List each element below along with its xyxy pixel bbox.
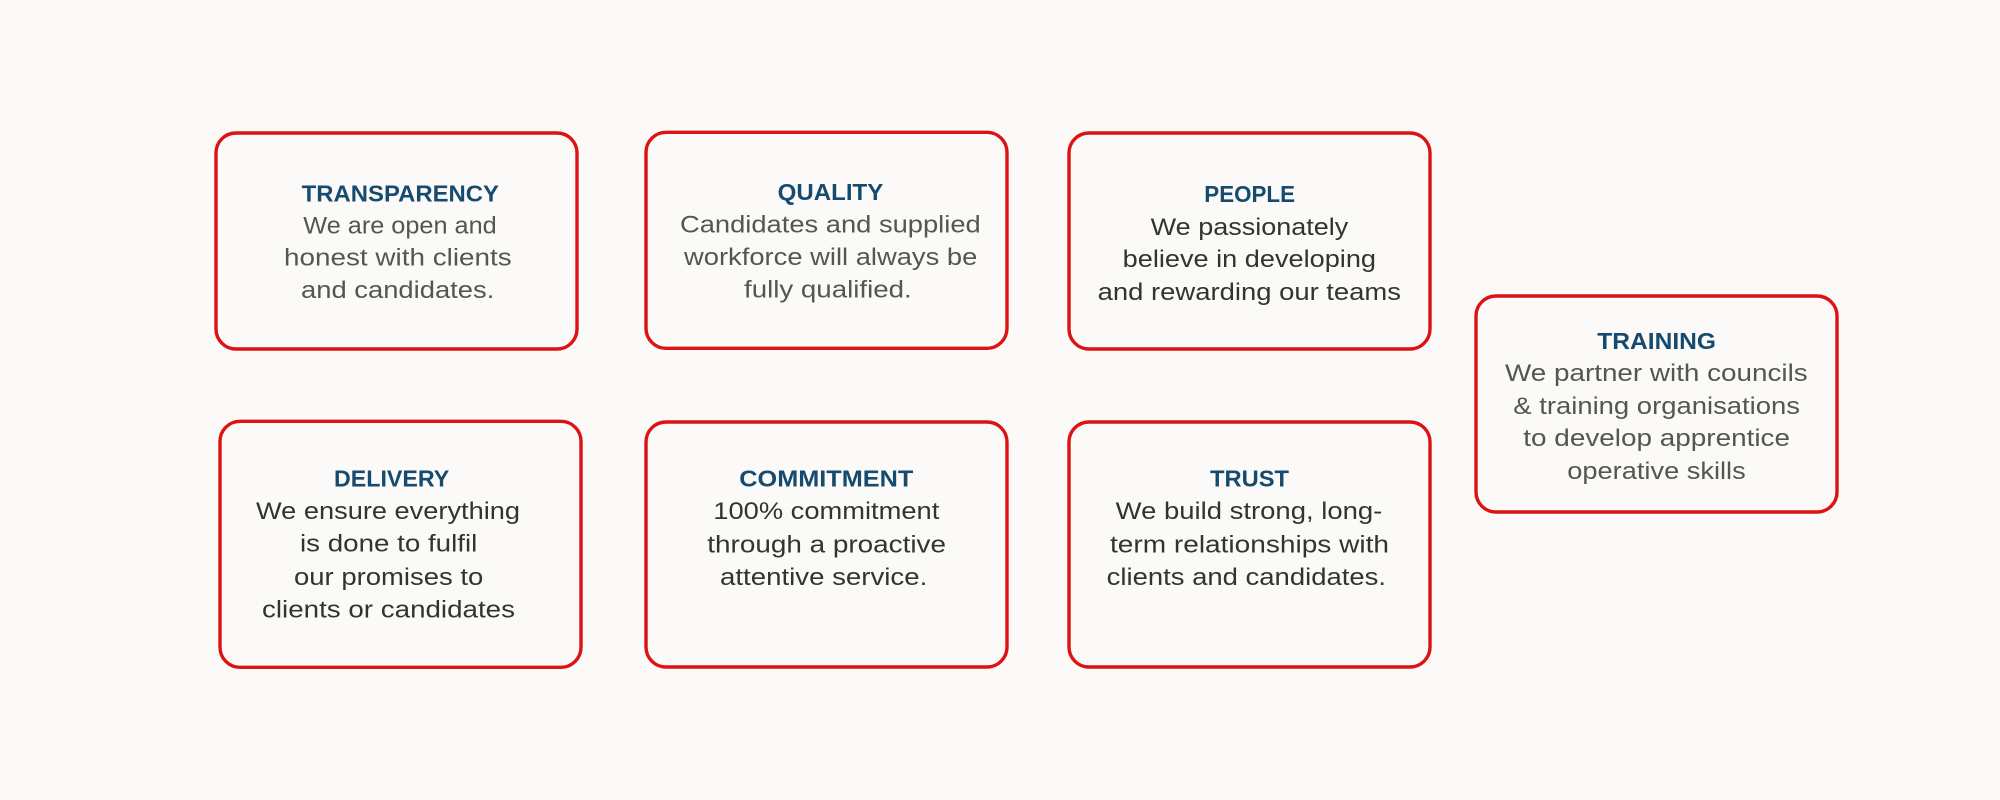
body text [284, 212, 512, 304]
body text: We are open and [303, 212, 497, 239]
body text: is done to fulfil [300, 531, 477, 558]
body text: Candidates and supplied [680, 212, 981, 239]
body text: our promises to [294, 564, 483, 591]
body text: and candidates. [301, 277, 494, 304]
body text: believe in developing [1123, 246, 1376, 273]
body text: through a proactive [707, 531, 946, 558]
card border [646, 132, 1007, 348]
body text: term relationships with [1110, 531, 1389, 558]
body text: We ensure everything [256, 498, 520, 525]
card border [1476, 296, 1837, 512]
body text: honest with clients [284, 244, 512, 272]
body text [256, 498, 520, 623]
body text: clients or candidates [262, 596, 515, 623]
heading: delivery: DELIVERY [334, 466, 449, 492]
body text: fully qualified. [744, 277, 912, 304]
body text: and rewarding our teams [1098, 279, 1401, 306]
body text: operative skills [1567, 458, 1746, 485]
card border [220, 421, 581, 667]
heading: commitment: COMMITMENT [739, 466, 913, 492]
heading: transparency: TRANSPARENCY [302, 181, 499, 207]
body text: We passionately [1151, 214, 1348, 241]
body text [1505, 360, 1808, 485]
card: people [1069, 133, 1430, 349]
body text [680, 212, 981, 304]
card border [646, 422, 1007, 667]
body text: clients and candidates. [1107, 564, 1386, 591]
body text [707, 498, 946, 591]
body text: We build strong, long- [1116, 498, 1382, 525]
body text: We partner with councils [1505, 360, 1808, 387]
heading: people: PEOPLE [1204, 181, 1295, 207]
card: commitment [646, 422, 1007, 667]
heading: quality: QUALITY [778, 179, 883, 205]
card: trust [1069, 422, 1430, 667]
body text: workforce will always be [683, 244, 977, 271]
body text: attentive service. [720, 564, 927, 591]
card border [216, 133, 577, 349]
body text [1107, 498, 1389, 591]
heading: training: TRAINING [1597, 328, 1716, 354]
body text [1098, 214, 1401, 306]
card: quality [646, 132, 1007, 348]
card: transparency [216, 133, 577, 349]
card border [1069, 133, 1430, 349]
body text: & training organisations [1513, 393, 1800, 420]
card: delivery [220, 421, 581, 667]
card: training [1476, 296, 1837, 512]
body text: 100% commitment [713, 498, 940, 525]
heading: trust: TRUST [1210, 466, 1289, 492]
card border [1069, 422, 1430, 667]
body text: to develop apprentice [1523, 425, 1790, 452]
